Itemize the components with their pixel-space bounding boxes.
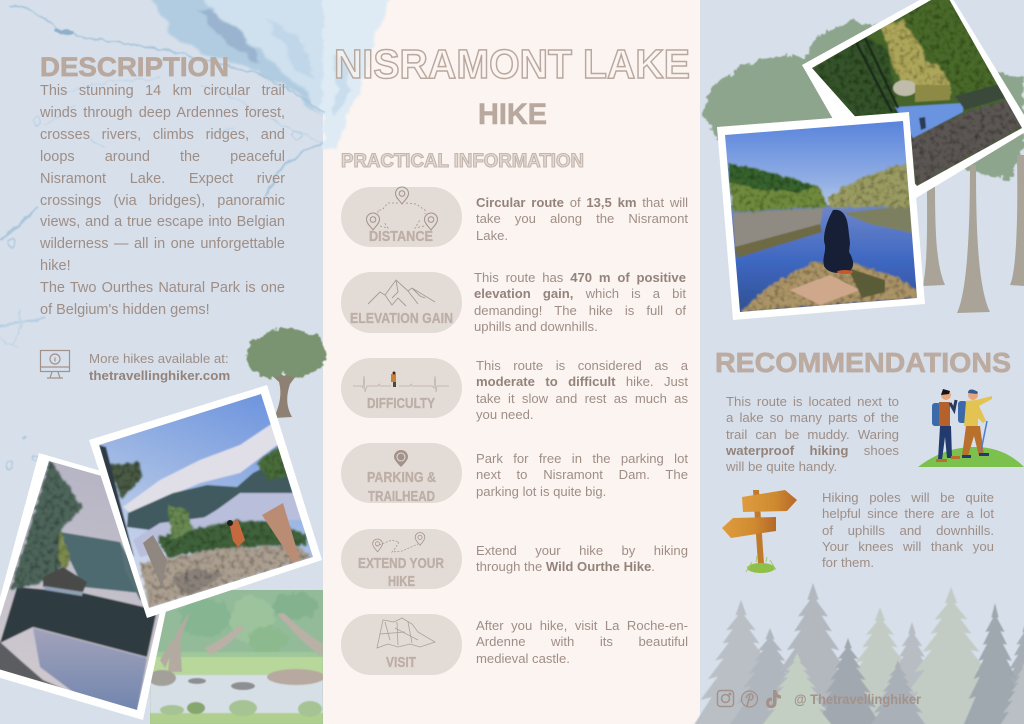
text block: distance: Lake. bbox=[476, 228, 508, 243]
pill: parking and trailhead bbox=[341, 443, 462, 505]
text block: description: wilderness — all in one unforgettable bbox=[40, 236, 285, 252]
text block: recommendation shoes: waterproof hiking shoes bbox=[726, 443, 899, 458]
pill: parking and trailhead: PARKING & bbox=[367, 469, 436, 486]
photo: lake with boathouse bbox=[0, 453, 166, 720]
subtitle: Hike: HIKE bbox=[478, 98, 547, 131]
text block: elevation: demanding! The hike is full of bbox=[474, 303, 686, 318]
icon: signpost bbox=[722, 490, 797, 573]
pill: elevation gain bbox=[341, 272, 462, 333]
icon: hikers bbox=[918, 389, 1024, 467]
text block: recommendation poles bbox=[822, 490, 994, 570]
text block: difficulty: take it slow and rest as much as bbox=[476, 391, 688, 406]
pill: distance: DISTANCE bbox=[369, 228, 433, 245]
text block: visit: Ardenne with its beautiful bbox=[476, 634, 688, 649]
text block: visit: medieval castle. bbox=[476, 651, 570, 666]
text block: more hikes link: More hikes available at: bbox=[89, 351, 229, 366]
pine forest bbox=[689, 583, 1024, 724]
water splash bbox=[0, 0, 395, 469]
text block: recommendation shoes bbox=[726, 394, 899, 474]
icon: tiktok bbox=[766, 690, 781, 708]
photo: person at the lake bbox=[717, 112, 925, 320]
panel: centre background bbox=[323, 0, 700, 724]
text block: description: The Two Ourthes Natural Park is one bbox=[40, 280, 285, 296]
text block: elevation bbox=[474, 270, 686, 334]
text block: distance: Circular route of 13,5 km that will bbox=[476, 195, 688, 210]
icon: monitor bbox=[40, 350, 70, 378]
text block: description: Nisramont Lake. Expect river bbox=[40, 171, 285, 187]
text block: more hikes link: thetravellinghiker.com bbox=[89, 368, 230, 382]
text block: distance bbox=[476, 195, 688, 243]
text block: description: of Belgium's hidden gems! bbox=[40, 302, 210, 318]
text block: description: This stunning 14 km circular trail bbox=[40, 83, 285, 99]
text block: elevation: elevation gain, which is a bit bbox=[474, 286, 686, 301]
icon: pinterest bbox=[742, 691, 758, 707]
pill: extend your hike bbox=[341, 529, 462, 590]
text block: recommendation poles: for them. bbox=[822, 555, 874, 570]
text block: recommendation shoes: a lake so many parts of the bbox=[726, 410, 899, 425]
text block: parking: parking lot is quite big. bbox=[476, 484, 606, 499]
pill: extend your hike: EXTEND YOUR bbox=[358, 555, 444, 572]
text block: description: hike! bbox=[40, 258, 71, 274]
pill: parking and trailhead: TRAILHEAD bbox=[368, 488, 435, 505]
text block: description: loops around the peaceful bbox=[40, 149, 285, 165]
text block: visit: After you hike, visit La Roche-en- bbox=[476, 618, 688, 633]
text block: elevation: This route has 470 m of positive bbox=[474, 270, 686, 285]
pill: distance bbox=[341, 187, 462, 247]
heading: Description: DESCRIPTION bbox=[40, 52, 229, 82]
tree: left panel bbox=[246, 328, 326, 418]
text block: description bbox=[40, 83, 285, 318]
photo: lake viewpoint bbox=[89, 385, 322, 618]
pill: difficulty: DIFFICULTY bbox=[367, 395, 435, 412]
text block: parking: Park for free in the parking lot bbox=[476, 451, 688, 466]
photo: forest lake with bench bbox=[802, 0, 1024, 215]
text block: difficulty: This route is considered as a bbox=[476, 358, 688, 373]
pill: elevation gain: ELEVATION GAIN bbox=[350, 310, 453, 327]
text block: extend bbox=[476, 543, 688, 574]
text block: description: views, and a true escape into Belgian bbox=[40, 214, 285, 230]
text block: recommendation shoes: This route is located next to bbox=[726, 394, 899, 409]
text block: difficulty bbox=[476, 358, 688, 422]
pill: difficulty bbox=[341, 358, 462, 418]
text block: distance: take you along the Nisramont bbox=[476, 211, 688, 226]
text block: extend: through the Wild Ourthe Hike. bbox=[476, 559, 655, 574]
heading: Recommendations: RECOMMENDATIONS bbox=[715, 347, 1011, 378]
trees: right panel bbox=[702, 20, 1024, 313]
text block: recommendation poles: Hiking poles will be quite bbox=[822, 490, 994, 505]
text block: description: crosses rivers, climbs ridges, and bbox=[40, 127, 285, 143]
text block: parking: next to Nisramont Dam. The bbox=[476, 467, 688, 482]
heading: Practical information: PRACTICAL INFORMATION bbox=[341, 151, 584, 172]
social handle: @ Thetravellinghiker bbox=[794, 692, 922, 707]
text block: difficulty: you need. bbox=[476, 407, 534, 422]
pill: visit bbox=[341, 614, 462, 675]
text block: parking bbox=[476, 451, 688, 499]
text block: visit bbox=[476, 618, 688, 666]
text block: description: winds through deep Ardennes forest, bbox=[40, 105, 285, 121]
text block: recommendation shoes: will be quite handy. bbox=[726, 459, 837, 474]
text block: description: crossings (via bridges), panoramic bbox=[40, 193, 285, 209]
text block: elevation: uphills and downhills. bbox=[474, 319, 598, 334]
text block: more hikes link bbox=[89, 351, 230, 382]
text block: difficulty: moderate to difficult hike. Just bbox=[476, 374, 688, 389]
text block: extend: Extend your hike by hiking bbox=[476, 543, 688, 558]
text block: recommendation poles: Your knees will thank you bbox=[822, 539, 994, 554]
title: Nisramont Lake: NISRAMONT LAKE bbox=[334, 41, 690, 87]
pill: extend your hike: HIKE bbox=[388, 573, 415, 590]
icon: instagram bbox=[718, 690, 734, 706]
text block: recommendation poles: helpful since there are a lot bbox=[822, 506, 994, 521]
text block: recommendation poles: of uphills and downhills. bbox=[822, 523, 994, 538]
forest illustration scene bbox=[148, 590, 325, 724]
pill: visit: VISIT bbox=[386, 654, 416, 671]
text block: recommendation shoes: trail can be muddy. Waring bbox=[726, 427, 899, 442]
